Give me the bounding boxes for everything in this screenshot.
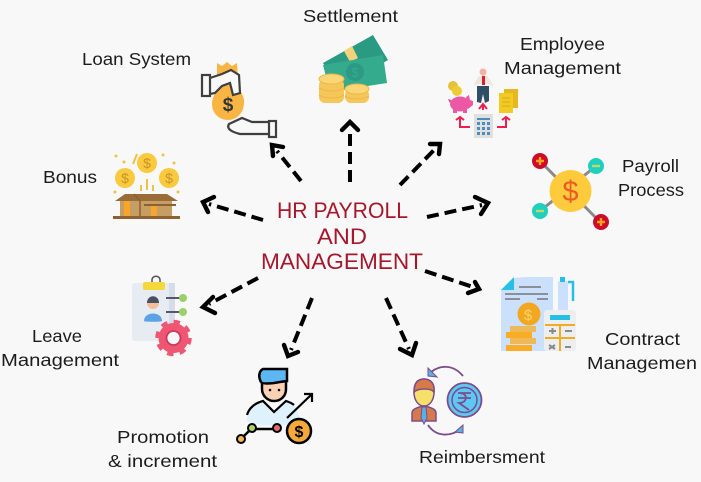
title: HR Payroll and Management: AND [317, 224, 367, 249]
icon: reimbursement person and rupee [412, 367, 482, 435]
label: Payroll Process: Payroll [622, 156, 679, 176]
label: Employee Management [504, 34, 621, 78]
arrow: to Promotion [284, 298, 312, 356]
icon: bonus box with coins: $ [165, 170, 173, 186]
icon: contract document, coins and calculator: $ [524, 307, 533, 324]
label: Leave Management [1, 326, 119, 370]
icon: settlement banknotes and coins [319, 35, 388, 103]
icon: loan money bag and hands: $ [223, 95, 234, 116]
label: Promotion & increment [108, 427, 217, 471]
icon: settlement banknotes and coins: $ [351, 65, 359, 80]
arrow: to Payroll Process [427, 197, 488, 217]
label: Leave Management: Leave [32, 326, 82, 346]
icon: contract document, coins and calculator [501, 277, 576, 351]
arrow: to Employee Management [400, 144, 440, 185]
label: Contract Management: Contract [605, 329, 680, 349]
arrow: to Loan System [272, 145, 301, 181]
icon: leave management clipboard and gear [132, 276, 190, 354]
label: Reimbersment: Reimbersment [419, 447, 545, 467]
icon: bonus box with coins [113, 153, 180, 219]
label: Settlement: Settlement [303, 6, 398, 26]
label: Payroll Process [618, 156, 684, 200]
icon: employee management [448, 68, 518, 138]
arrow: to Bonus [203, 197, 263, 220]
label: Employee Management: Employee [520, 34, 605, 54]
title: HR Payroll and Management: HR PAYROLL [277, 198, 408, 223]
label: Leave Management: Management [1, 350, 119, 370]
title: HR Payroll and Management: MANAGEMENT [261, 249, 423, 274]
label: Employee Management: Management [504, 58, 621, 78]
arrow: to Settlement [342, 122, 358, 182]
arrow: to Reimbursement [386, 298, 416, 355]
icon: bonus box with coins: $ [143, 155, 151, 171]
icon: payroll process network: $ [562, 176, 579, 208]
label: Bonus: Bonus [43, 167, 97, 187]
label: Contract Management: Managemen [587, 353, 697, 373]
title: HR Payroll and Management [261, 198, 423, 274]
label: Promotion & increment: Promotion [117, 427, 209, 447]
label: Loan System: Loan System [82, 49, 191, 69]
icon: payroll process network [532, 153, 609, 230]
icon: promotion person with growth chart [237, 369, 312, 443]
icon: loan money bag and hands [202, 62, 276, 137]
label: Promotion & increment: & increment [108, 451, 217, 471]
icon: bonus box with coins: $ [121, 170, 129, 186]
arrow: to Leave Management [203, 278, 258, 313]
label: Contract Management [587, 329, 697, 373]
label: Payroll Process: Process [618, 180, 684, 200]
icon: promotion person with growth chart: $ [295, 424, 304, 441]
arrow: to Contract Management [425, 271, 479, 293]
